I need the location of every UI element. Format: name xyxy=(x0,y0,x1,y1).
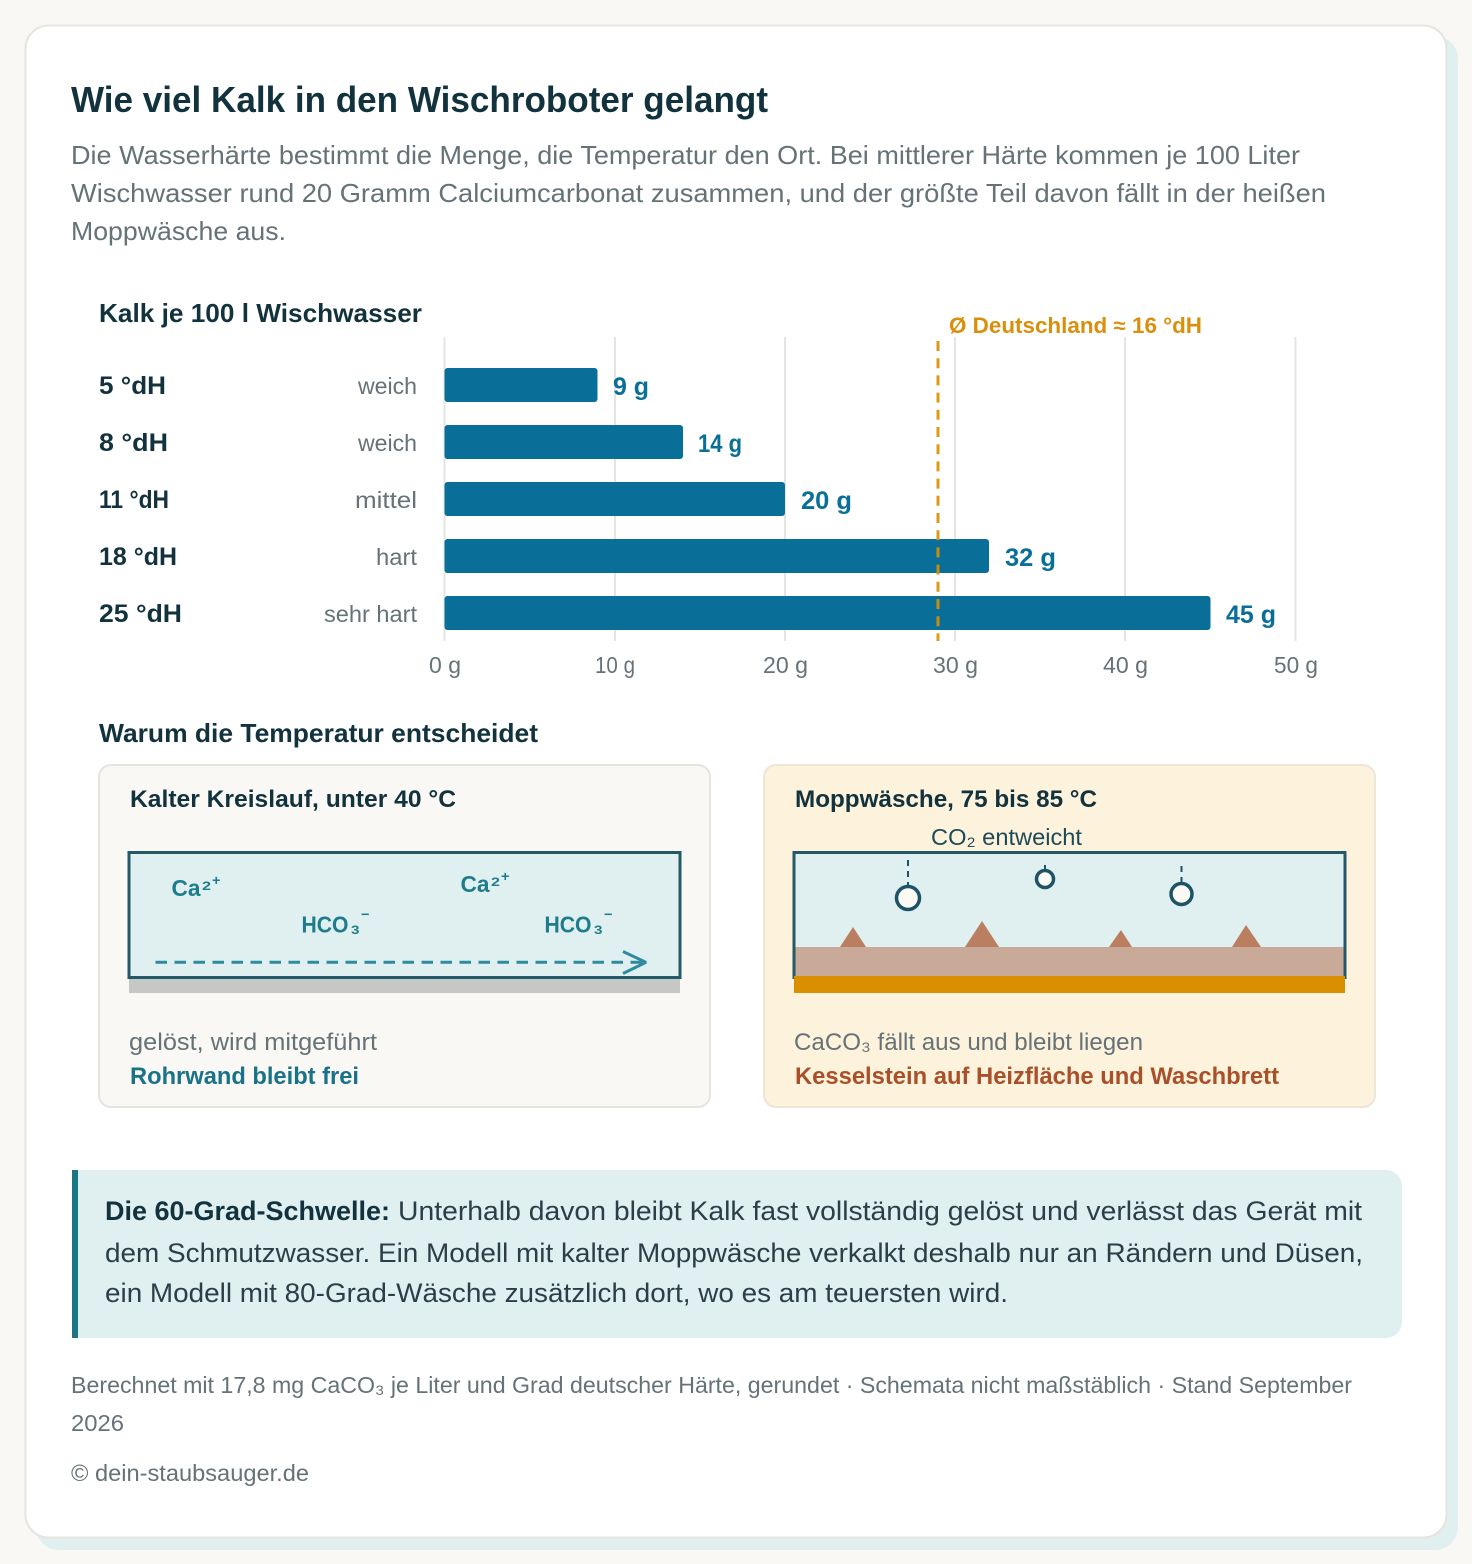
ion labels xyxy=(172,868,612,938)
row labels: 5 °dH xyxy=(99,372,166,400)
bar values xyxy=(613,373,1276,629)
intro text xyxy=(71,140,1326,246)
row labels: 18 °dH xyxy=(99,543,177,571)
bar chart xyxy=(99,313,1318,678)
pipe schematic xyxy=(129,852,680,993)
intro text: Die Wasserhärte bestimmt die Menge, die Temperatur den Ort. Bei mittlerer Härte kommen je 100 Liter xyxy=(71,140,1300,170)
axis labels: 40 g xyxy=(1103,652,1148,678)
panel heading: Kalter Kreislauf, unter 40 °C xyxy=(130,786,456,813)
panel caption: gelöst, wird mitgeführt xyxy=(129,1029,377,1056)
callout: Die 60-Grad-Schwelle: xyxy=(105,1196,390,1226)
row labels: hart xyxy=(376,544,418,570)
scale deposits xyxy=(840,921,1261,947)
row labels xyxy=(99,372,418,628)
axis labels xyxy=(429,652,1318,678)
footnote: Berechnet mit 17,8 mg CaCO₃ je Liter und Grad deutscher Härte, gerundet · Schemata nicht maßstäblich · Stand September xyxy=(71,1372,1352,1398)
bar values: 20 g xyxy=(801,487,852,515)
copyright: © dein-staubsauger.de xyxy=(71,1460,309,1486)
bar values: 9 g xyxy=(613,373,649,401)
panel caption: CaCO₃ fällt aus und bleibt liegen xyxy=(794,1029,1143,1056)
average marker line xyxy=(936,341,940,641)
bar values: 45 g xyxy=(1226,601,1276,629)
intro text: Moppwäsche aus. xyxy=(71,216,286,246)
ion labels: 3 xyxy=(351,923,360,937)
ion labels: − xyxy=(361,906,370,922)
bar values: 14 g xyxy=(698,430,742,458)
row labels: 11 °dH xyxy=(99,486,169,514)
row labels: weich xyxy=(357,430,417,456)
ion labels: Ca xyxy=(460,871,490,897)
footnote xyxy=(71,1372,1352,1436)
axis labels: 10 g xyxy=(595,652,635,678)
axis labels: 20 g xyxy=(763,652,808,678)
chart heading: Kalk je 100 l Wischwasser xyxy=(99,298,422,328)
gas bubbles xyxy=(896,870,1192,910)
row labels: mittel xyxy=(355,487,417,513)
axis labels: 50 g xyxy=(1274,652,1318,678)
bars xyxy=(444,368,1210,630)
ion labels: 2 xyxy=(491,875,500,889)
title: Wie viel Kalk in den Wischroboter gelangt xyxy=(71,79,768,120)
ion labels: + xyxy=(501,868,510,884)
row labels: sehr hart xyxy=(324,601,418,627)
row labels: weich xyxy=(357,373,417,399)
panel conclusion: Rohrwand bleibt frei xyxy=(130,1063,359,1090)
ion labels: − xyxy=(604,906,612,922)
average label: Ø Deutschland ≈ 16 °dH xyxy=(949,313,1202,338)
ion labels: HCO xyxy=(302,912,348,938)
flow arrow xyxy=(156,952,646,974)
callout: ein Modell mit 80-Grad-Wäsche zusätzlich dort, wo es am teuersten wird. xyxy=(105,1278,1008,1308)
bar values: 32 g xyxy=(1005,544,1056,572)
panel: hot wash xyxy=(764,765,1375,1107)
section heading: Warum die Temperatur entscheidet xyxy=(99,718,538,748)
ion labels: + xyxy=(212,872,220,888)
ion labels: 3 xyxy=(594,923,603,937)
ion labels: 2 xyxy=(202,879,211,893)
footnote: 2026 xyxy=(71,1410,124,1436)
scale schematic xyxy=(794,852,1345,993)
row labels: 8 °dH xyxy=(99,429,168,457)
panel conclusion: Kesselstein auf Heizfläche und Waschbrett xyxy=(795,1063,1279,1090)
callout: dem Schmutzwasser. Ein Modell mit kalter Moppwäsche verkalkt deshalb nur an Rändern und Düsen, xyxy=(105,1238,1363,1268)
callout: Unterhalb davon bleibt Kalk fast vollständig gelöst und verlässt das Gerät mit xyxy=(398,1196,1363,1226)
panel heading: Moppwäsche, 75 bis 85 °C xyxy=(795,786,1097,813)
intro text: Wischwasser rund 20 Gramm Calciumcarbonat zusammen, und der größte Teil davon fällt in der heißen xyxy=(71,178,1326,208)
callout xyxy=(72,1170,1402,1338)
axis labels: 30 g xyxy=(933,652,978,678)
panel: cold cycle xyxy=(99,765,710,1107)
ion labels: HCO xyxy=(544,912,592,938)
co2 label: CO₂ entweicht xyxy=(931,824,1083,850)
axis labels: 0 g xyxy=(429,652,461,678)
ion labels: Ca xyxy=(172,875,201,901)
row labels: 25 °dH xyxy=(99,600,182,628)
